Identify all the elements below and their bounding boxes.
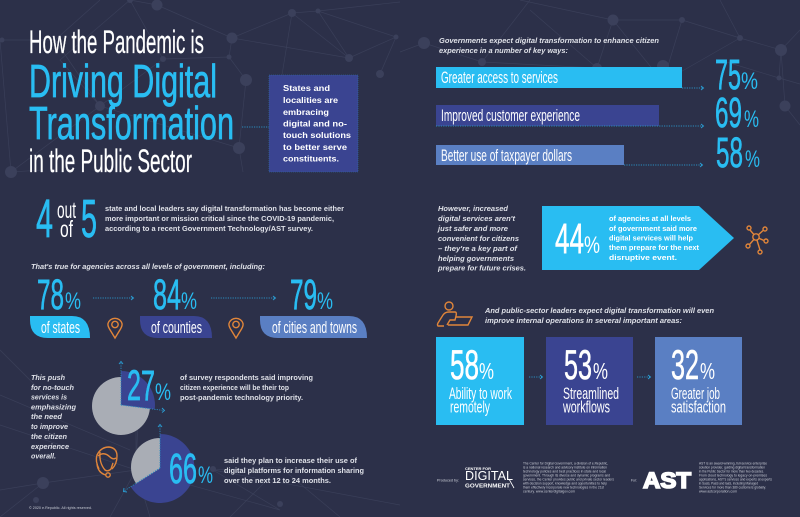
text: no-touch services: the citizen: [31, 432, 67, 441]
stat: 78% of states: 78: [37, 271, 64, 319]
heading: internal operations: improve internal operations in several important areas:: [485, 316, 682, 325]
text: 66% description: digital platforms for information sharing: [224, 466, 364, 475]
card: greater job satisfaction: Greater job: [671, 384, 720, 403]
title: Driving Digital: [29, 55, 217, 107]
card: ability to work remotely: remotely: [450, 398, 490, 416]
heading: citizen experience: Governments expect digital transformation to enhance citizen: [439, 36, 659, 45]
heading: agencies across government: That's true for agencies across all levels of government, including:: [31, 262, 265, 271]
text: about AST: applications, AST's services and experts at experts: [699, 476, 772, 482]
text: no-touch services: overall.: [31, 452, 56, 460]
stat: 78% of states: [30, 271, 90, 338]
heading: citizen experience: [439, 36, 659, 55]
callout: states and localities: localities are: [283, 96, 339, 105]
text: future crises: prepare for future crises.: [437, 264, 526, 272]
text: no-touch services: services is: [31, 392, 67, 402]
heading: internal operations: [484, 306, 714, 325]
arrow banner: 44%: of government said more: [609, 224, 697, 233]
stat: 79% of cities and towns: %: [317, 288, 333, 315]
text: 4 out of 5 description: more important or mission critical since the COVID-19 pandemic,: [105, 214, 334, 223]
text: about Center for Digital Government: with decision support, knowledge and opportunities to help: [523, 480, 607, 486]
stat: 84% of counties: of counties: [151, 318, 202, 337]
icon: person at laptop: [438, 302, 472, 326]
stat: 4 out of 5: of: [60, 216, 73, 242]
text: about AST: www.astcorporation.com: [699, 488, 737, 494]
bar: better use of taxpayer dollars 58%: %: [745, 146, 760, 173]
stat: 78% of states: of states: [41, 318, 80, 337]
text: about AST: Services for more than 380 customers globally.: [699, 484, 766, 490]
arrow: [637, 375, 650, 379]
bar: greater access to services 75%: [436, 51, 758, 99]
text: no-touch services: emphasizing: [31, 402, 76, 412]
text: future crises: – they're a key part of: [438, 244, 518, 253]
logo: AST: AST: [643, 468, 692, 493]
card: greater job satisfaction: 32: [671, 341, 699, 388]
text: 4 out of 5 description: state and local leaders say digital transformation has become either: [105, 204, 344, 213]
logo: Center for Digital Government: [465, 466, 514, 490]
arrow: [529, 375, 542, 379]
card: streamlined workflows: [546, 337, 633, 425]
text: 66% description: over the next 12 to 24 months.: [224, 476, 331, 485]
stat: 79% of cities and towns: [260, 271, 367, 338]
bar: greater access to services 75%: %: [741, 68, 758, 95]
text: 66% description: said they plan to increase their use of: [224, 456, 357, 465]
text: future crises: helping governments: [438, 254, 514, 263]
text: about AST: [699, 460, 772, 494]
pie chart: 66%: %: [198, 462, 213, 489]
text: about Center for Digital Government: services, the Center provides public and private sector leaders: [523, 476, 614, 482]
text: about AST: solution provider, guiding digital transformation: [699, 464, 765, 470]
arrow banner: 44%: [542, 206, 734, 270]
card: ability to work remotely: %: [479, 358, 494, 384]
text: future crises: [437, 204, 526, 272]
text: about Center for Digital Government: government. Through its diverse and dynamic programs and: [523, 472, 610, 478]
card: ability to work remotely: Ability to work: [449, 384, 512, 403]
callout: states and localities: digital and no-: [283, 120, 347, 128]
arrow banner: 44%: of agencies at all levels: [609, 214, 691, 223]
arrow banner: 44%: them prepare for the next: [609, 243, 699, 252]
label: for: For:: [631, 478, 637, 482]
bar: improved customer experience 69%: %: [744, 106, 759, 133]
text: 27% description: [180, 373, 313, 402]
text: 66% description: [224, 456, 364, 485]
bar: improved customer experience 69%: 69: [715, 89, 742, 137]
text: no-touch services: [31, 373, 76, 460]
text: about Center for Digital Government: is a national research and advisory institute on information: [523, 464, 607, 470]
text: about AST: in the Public Sector for more than two decades.: [699, 468, 764, 474]
title: [29, 24, 234, 179]
arrow: [93, 296, 134, 300]
card: ability to work remotely: [436, 337, 524, 425]
text: no-touch services: experience: [31, 442, 70, 451]
arrow banner: 44%: 44: [555, 215, 584, 263]
arrow banner: 44%: %: [584, 232, 600, 259]
text: about Center for Digital Government: technology policies and best practices in state and local: [523, 468, 606, 474]
card: ability to work remotely: 58: [450, 341, 479, 388]
stat: 84% of counties: 84: [153, 271, 181, 319]
pie chart: 27%: [92, 362, 171, 435]
text: 27% description: of survey respondents said improving: [180, 373, 313, 382]
pie chart: 27%: 27: [127, 362, 155, 410]
text: about Center for Digital Government: century. www.centerdigitalgov.com: [523, 488, 575, 494]
icon: person with headset: [96, 447, 117, 477]
callout: states and localities: States and: [283, 84, 330, 93]
card: streamlined workflows: Streamlined: [563, 384, 619, 403]
icon: location pin: [108, 318, 122, 338]
text: 4 out of 5 description: according to a recent Government Technology/AST survey.: [105, 224, 313, 233]
card: streamlined workflows: 53: [564, 341, 592, 388]
callout: states and localities: constituents.: [283, 154, 339, 164]
text: 27% description: citizen experience will be their top: [180, 383, 289, 392]
arrow: [211, 296, 276, 300]
logo: Center for Digital Government: CENTER FOR: [465, 466, 491, 471]
logo: Center for Digital Government: GOVERNMENT: [465, 484, 511, 490]
title: in the Public Sector: [29, 143, 192, 179]
pie chart: 66%: [124, 424, 213, 503]
stat: 4 out of 5: 5: [81, 189, 97, 249]
callout: states and localities: [242, 75, 358, 172]
text: future crises: convenient for citizens: [438, 234, 519, 243]
card: streamlined workflows: %: [593, 358, 608, 384]
text: future crises: However, increased: [438, 204, 508, 213]
bar: greater access to services 75%: 75: [715, 51, 741, 99]
card: greater job satisfaction: [655, 337, 742, 425]
text: future crises: digital services aren't: [438, 214, 515, 223]
copyright: © 2020 e.Republic. All rights reserved.: [29, 505, 92, 510]
text: about Center for Digital Government: them effectively incorporate new technologies in the 21st: [523, 484, 605, 490]
title: How the Pandemic is: [29, 24, 204, 60]
text: no-touch services: the need: [31, 412, 62, 421]
callout: states and localities: touch solutions: [283, 131, 352, 140]
card: streamlined workflows: workflows: [562, 398, 610, 416]
icon: location pin: [229, 318, 243, 338]
text: 27% description: post-pandemic technology priority.: [180, 393, 303, 402]
label: produced by: Produced by:: [437, 478, 459, 482]
bar: better use of taxpayer dollars 58%: Better use of taxpayer dollars: [441, 146, 572, 165]
stat: 79% of cities and towns: of cities and towns: [272, 318, 357, 337]
text: about Center for Digital Government: The Center for Digital Government, a division of e.Republic,: [523, 460, 608, 466]
stat: 4 out of 5: 4: [36, 189, 53, 249]
heading: internal operations: And public-sector leaders expect digital transformation will even: [484, 306, 714, 315]
text: about Center for Digital Government: [523, 460, 614, 494]
bar: improved customer experience 69%: [436, 89, 759, 137]
callout: states and localities: to better serve: [283, 143, 348, 152]
arrow banner: 44%: disruptive event.: [609, 253, 677, 262]
stat: 84% of counties: %: [181, 288, 197, 315]
text: future crises: just safer and more: [437, 224, 509, 233]
callout: states and localities: embracing: [283, 108, 329, 117]
card: greater job satisfaction: satisfaction: [671, 398, 726, 416]
pie chart: 27%: %: [155, 379, 171, 406]
text: about AST: AST is an award-winning, full-service enterprise: [699, 460, 767, 466]
arrow banner: 44%: digital services will help: [609, 234, 693, 242]
stat: 4 out of 5: out: [57, 197, 76, 223]
text: about AST: in SaaS, PaaS and IaaS, including Managed: [699, 480, 758, 486]
text: no-touch services: for no-touch: [31, 383, 74, 392]
bar: greater access to services 75%: Greater access to services: [441, 68, 558, 87]
title: Transformation: [29, 97, 234, 149]
icon: network nodes: [746, 226, 768, 254]
logo: Center for Digital Government: DIGITAL: [465, 469, 513, 483]
bar: better use of taxpayer dollars 58%: 58: [716, 129, 743, 177]
heading: citizen experience: experience in a number of key ways:: [439, 46, 568, 55]
stat: 4 out of 5: [36, 189, 97, 249]
stat: 78% of states: %: [65, 288, 81, 315]
text: no-touch services: This push: [31, 373, 65, 382]
stat: 84% of counties: [140, 271, 212, 338]
text: 4 out of 5 description: [105, 204, 344, 233]
text: about AST: From cloud technology to legacy on-premises: [699, 472, 767, 478]
pie chart: 66%: 66: [169, 445, 197, 493]
bar: improved customer experience 69%: Improved customer experience: [441, 106, 580, 125]
text: no-touch services: to improve: [31, 422, 69, 431]
card: greater job satisfaction: %: [700, 358, 715, 384]
bar: better use of taxpayer dollars 58%: [436, 129, 760, 177]
stat: 79% of cities and towns: 79: [290, 271, 317, 319]
